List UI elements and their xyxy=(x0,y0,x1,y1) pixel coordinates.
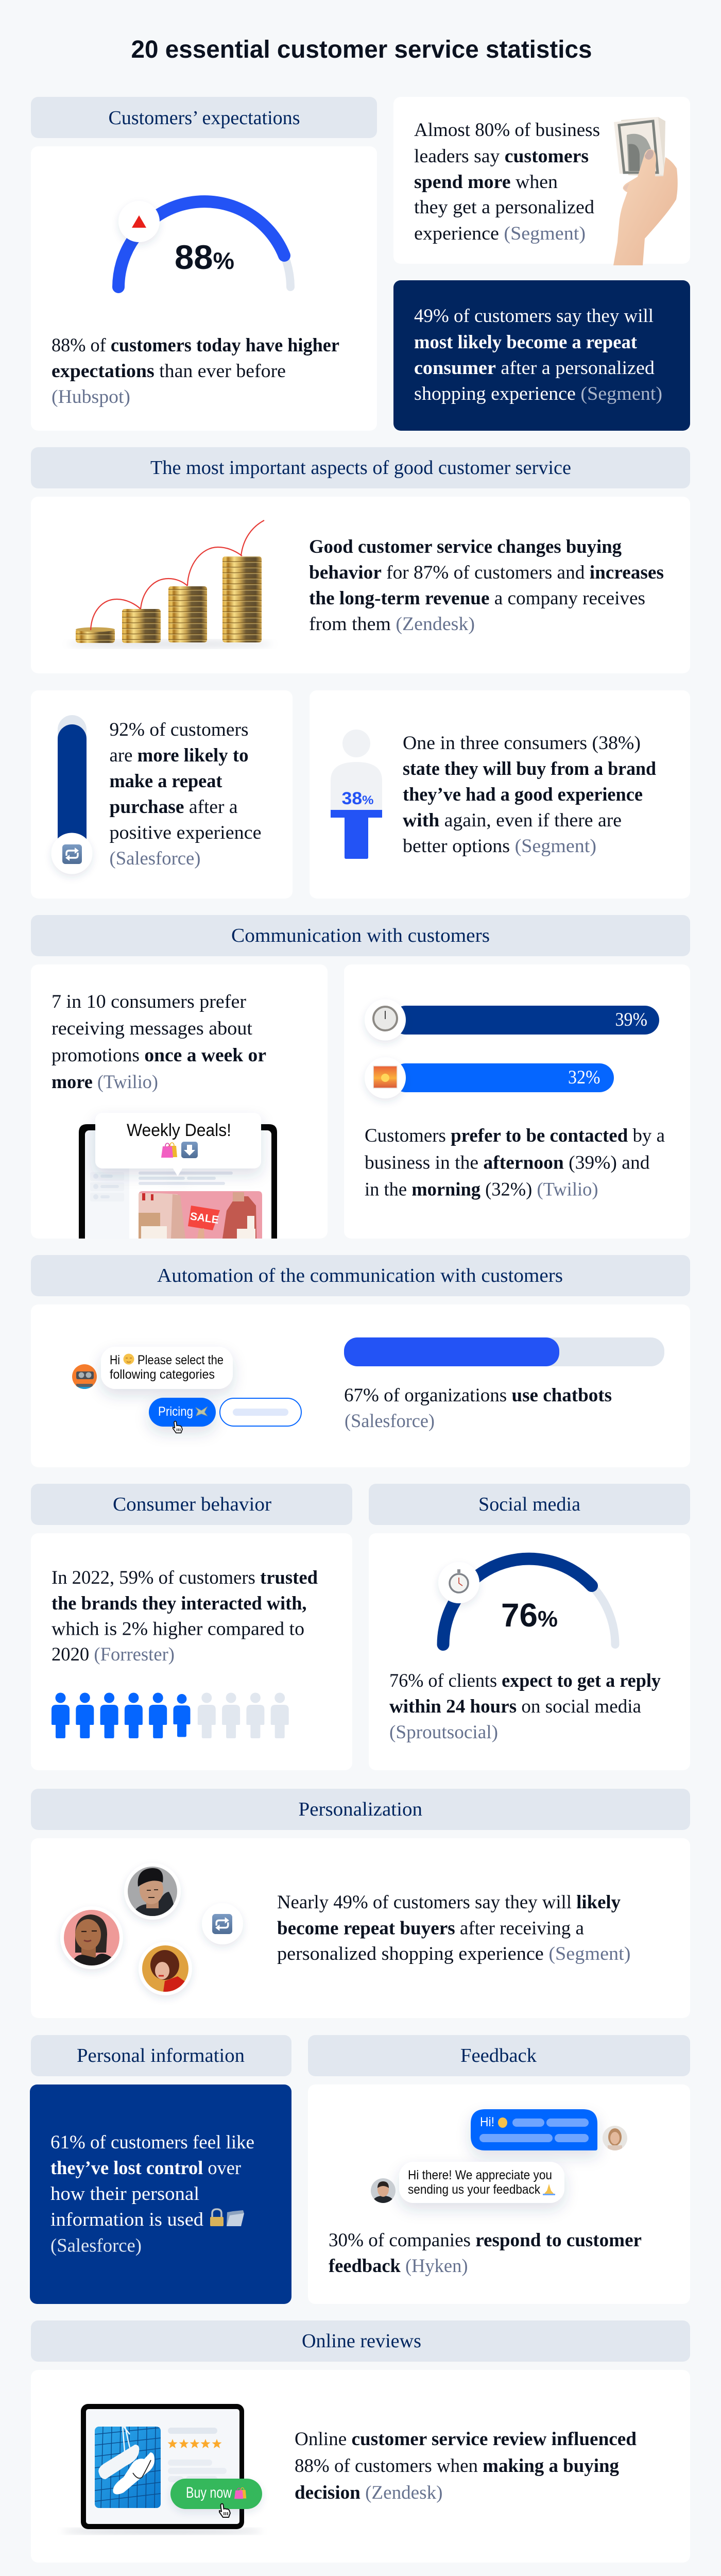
illustration: tablet with shoes: Buy now xyxy=(186,2484,232,2501)
text: changes buying behavior xyxy=(309,536,664,635)
text: higher expectations xyxy=(52,335,339,408)
text: reply within 24 hours: within 24 hours on social media xyxy=(389,1696,641,1717)
text: changes buying behavior: the long-term revenue a company receives xyxy=(309,588,645,609)
illustration: chatbot conversation: Pricing xyxy=(158,1404,193,1419)
bar: afternoon 39%: 39% xyxy=(615,1009,647,1030)
text: respond to feedback: feedback (Hyken) xyxy=(329,2256,468,2277)
section heading: personalization xyxy=(31,1789,690,1830)
text: reply within 24 hours xyxy=(389,1670,661,1743)
text: respond to feedback xyxy=(329,2230,642,2277)
section heading: personal information xyxy=(31,2035,291,2076)
title: 20 essential customer service statistics xyxy=(131,36,592,63)
person chart: 38% xyxy=(331,730,382,859)
text: repeat buyers xyxy=(277,1892,630,1964)
text: review influence: Online customer service review influenced xyxy=(295,2429,637,2450)
section heading: consumer behavior: Consumer behavior xyxy=(113,1494,271,1515)
section heading: personal information: Personal information xyxy=(77,2045,245,2066)
panel: 88% expectations xyxy=(31,146,377,431)
text: respond to feedback: 30% of companies respond to customer xyxy=(329,2230,642,2251)
panel: lost control: information is used xyxy=(50,2209,204,2230)
illustration: chatbot conversation: following categories xyxy=(110,1367,215,1382)
panel: lost control: (Salesforce) xyxy=(50,2235,142,2257)
illustration: tablet with shoes xyxy=(62,2404,263,2534)
text: spend more: spend more when xyxy=(414,172,558,193)
section heading: automation xyxy=(31,1255,690,1296)
section heading: consumer behavior xyxy=(31,1484,352,1525)
panel: feedback xyxy=(308,2084,690,2304)
text: spend more: leaders say customers xyxy=(414,146,589,167)
panel: repeat consumer: shopping experience (Segment) xyxy=(414,383,662,404)
text: changes buying behavior: Good customer service changes buying xyxy=(309,536,622,557)
illustration: feedback chat: Hi there! We appreciate you xyxy=(408,2168,552,2182)
panel: lost control: how their personal xyxy=(50,2183,199,2205)
panel: buying behavior xyxy=(31,497,690,673)
section heading: feedback: Feedback xyxy=(460,2045,537,2066)
text: use chatbots xyxy=(344,1385,612,1432)
panel: spend more xyxy=(393,97,690,265)
panel: social media xyxy=(369,1533,690,1770)
text: spend more: Almost 80% of business xyxy=(414,120,600,141)
panel: contact times xyxy=(344,964,690,1239)
panel: lost control xyxy=(30,2084,291,2304)
section heading: important aspects: The most important aspects of good customer service xyxy=(150,457,571,479)
panel: personalization xyxy=(31,1838,690,2018)
image: customer portraits xyxy=(60,1863,243,1995)
person chart: 38%: 38% xyxy=(342,789,374,808)
image: sale photo xyxy=(139,1191,262,1239)
panel: weekly promotions xyxy=(31,964,328,1239)
panel: repeat consumer: consumer after a personalized xyxy=(414,358,655,379)
text: 7 in 10 consumers: promotions once a week or xyxy=(52,1045,266,1066)
text: buy from a brand: they’ve had a good experience xyxy=(403,784,643,805)
portrait: man in beanie xyxy=(124,1863,181,1920)
text: review influence xyxy=(295,2429,637,2503)
text: trusted brands: the brands they interacted with, xyxy=(52,1593,307,1614)
panel: repeat consumer: 49% of customers say they will xyxy=(414,306,654,327)
text: buy from a brand: One in three consumers (38%) xyxy=(403,733,641,754)
text: changes buying behavior: from them (Zendesk) xyxy=(309,614,475,635)
gauge: 76%: 76% xyxy=(501,1597,558,1634)
panel: one in three consumers xyxy=(310,690,690,899)
text: use chatbots: 67% of organizations use chatbots xyxy=(344,1385,612,1406)
text: trusted brands xyxy=(52,1567,318,1665)
rating stars xyxy=(168,2439,221,2448)
progress bar: 67% xyxy=(344,1337,664,1366)
text: changes buying behavior: behavior for 87% of customers and increases xyxy=(309,562,664,583)
text: repeat purchase: (Salesforce) xyxy=(109,848,201,869)
illustration: feedback chat: sending us your feedback xyxy=(408,2182,540,2197)
text: use chatbots: (Salesforce) xyxy=(345,1411,435,1432)
text: buy from a brand: better options (Segment) xyxy=(403,836,596,857)
illustration: feedback chat: Hi! xyxy=(480,2115,494,2129)
bar: morning 32% xyxy=(365,1057,614,1098)
illustration: chatbot conversation: Please select the xyxy=(138,1353,224,1367)
image: sale photo: SALE xyxy=(190,1210,219,1226)
panel: repeat consumer xyxy=(393,280,690,431)
section heading: feedback xyxy=(308,2035,690,2076)
section heading: online reviews: Online reviews xyxy=(302,2330,421,2352)
gauge: 88% xyxy=(118,201,290,287)
section heading: social media: Social media xyxy=(478,1494,580,1515)
section heading: Customers' expectations: Customers’ expectations xyxy=(108,107,300,129)
section heading: online reviews xyxy=(31,2320,690,2362)
image: tablet with weekly deals xyxy=(79,1113,277,1239)
panel: repeat consumer: most likely become a repeat xyxy=(414,332,638,353)
section heading: Customers' expectations xyxy=(31,97,377,138)
text: spend more: experience (Segment) xyxy=(414,223,586,244)
text: trusted brands: 2020 (Forrester) xyxy=(52,1644,175,1665)
text: trusted brands: In 2022, 59% of customers trusted xyxy=(52,1567,318,1588)
section heading: social media xyxy=(369,1484,690,1525)
text: buy from a brand xyxy=(403,733,656,857)
bar: morning 32%: 32% xyxy=(568,1067,600,1088)
panel: lost control: they’ve lost control over xyxy=(50,2158,241,2179)
text: repeat purchase: positive experience xyxy=(109,822,262,843)
text: 7 in 10 consumers: more (Twilio) xyxy=(52,1072,158,1093)
panel: online reviews xyxy=(31,2370,690,2563)
avatar: woman xyxy=(603,2126,627,2150)
text: higher expectations: 88% of customers today have higher xyxy=(52,335,339,356)
avatar: man xyxy=(371,2178,396,2203)
text: 7 in 10 consumers xyxy=(52,991,266,1093)
pictogram: people 59% xyxy=(52,1693,289,1738)
illustration: chatbot conversation: Hi xyxy=(110,1353,120,1367)
text: buy from a brand: state they will buy from a brand xyxy=(403,758,656,779)
text: repeat purchase: make a repeat xyxy=(109,771,222,792)
text: review influence: 88% of customers when making a buying xyxy=(295,2455,619,2477)
panel: lost control: 61% of customers feel like xyxy=(50,2132,254,2153)
text: buy from a brand: with again, even if there are xyxy=(403,810,622,831)
text: prefer to be contacted: Customers prefer to be contacted by a xyxy=(365,1125,665,1146)
text: prefer to be contacted xyxy=(365,1125,665,1200)
text: 7 in 10 consumers: 7 in 10 consumers prefer xyxy=(52,991,246,1012)
section heading: communication: Communication with customers xyxy=(231,925,490,946)
text: review influence: decision (Zendesk) xyxy=(295,2482,443,2503)
vertical progress bar: 92% xyxy=(52,715,93,874)
portrait: woman on pink xyxy=(60,1906,123,1969)
bar: afternoon 39% xyxy=(365,999,659,1041)
text: higher expectations: expectations than ever before xyxy=(52,361,286,382)
text: repeat buyers: Nearly 49% of customers say they will likely xyxy=(277,1892,621,1913)
image: stacks of gold coins with red arrows xyxy=(67,520,273,648)
gauge: 88%: 88% xyxy=(175,238,234,276)
text: repeat buyers: personalized shopping experience (Segment) xyxy=(277,1943,630,1964)
illustration: chatbot conversation xyxy=(72,1347,301,1433)
icon: repeat xyxy=(202,1903,243,1944)
icon: lock and folder xyxy=(210,2209,244,2226)
section heading: automation: Automation of the communication with customers xyxy=(157,1265,563,1286)
text: prefer to be contacted: business in the afternoon (39%) and xyxy=(365,1152,650,1174)
image: hand holding money xyxy=(613,117,678,265)
panel: chatbots xyxy=(31,1304,690,1467)
text: 7 in 10 consumers: receiving messages about xyxy=(52,1018,253,1039)
section heading: communication xyxy=(31,915,690,956)
text: spend more xyxy=(414,120,600,244)
illustration: feedback chat xyxy=(371,2109,627,2203)
text: repeat purchase: purchase after a xyxy=(109,796,238,818)
image: tablet with weekly deals: Weekly Deals! xyxy=(127,1121,231,1140)
text: repeat purchase xyxy=(109,719,262,869)
text: repeat buyers: become repeat buyers after receiving a xyxy=(277,1918,584,1939)
text: reply within 24 hours: (Sproutsocial) xyxy=(389,1722,498,1743)
text: reply within 24 hours: 76% of clients expect to get a reply xyxy=(389,1670,661,1691)
portrait: woman on yellow xyxy=(139,1942,192,1995)
text: repeat purchase: 92% of customers xyxy=(109,719,248,740)
panel: repeat purchase xyxy=(31,690,293,899)
text: spend more: they get a personalized xyxy=(414,197,595,218)
text: repeat purchase: are more likely to xyxy=(109,745,248,766)
text: prefer to be contacted: in the morning (32%) (Twilio) xyxy=(365,1179,598,1200)
panel: consumer behavior xyxy=(31,1533,352,1770)
section heading: important aspects xyxy=(31,447,690,488)
gauge: 76% xyxy=(438,1559,615,1645)
section heading: personalization: Personalization xyxy=(299,1799,422,1820)
text: trusted brands: which is 2% higher compared to xyxy=(52,1619,304,1639)
text: higher expectations: (Hubspot) xyxy=(52,386,130,408)
